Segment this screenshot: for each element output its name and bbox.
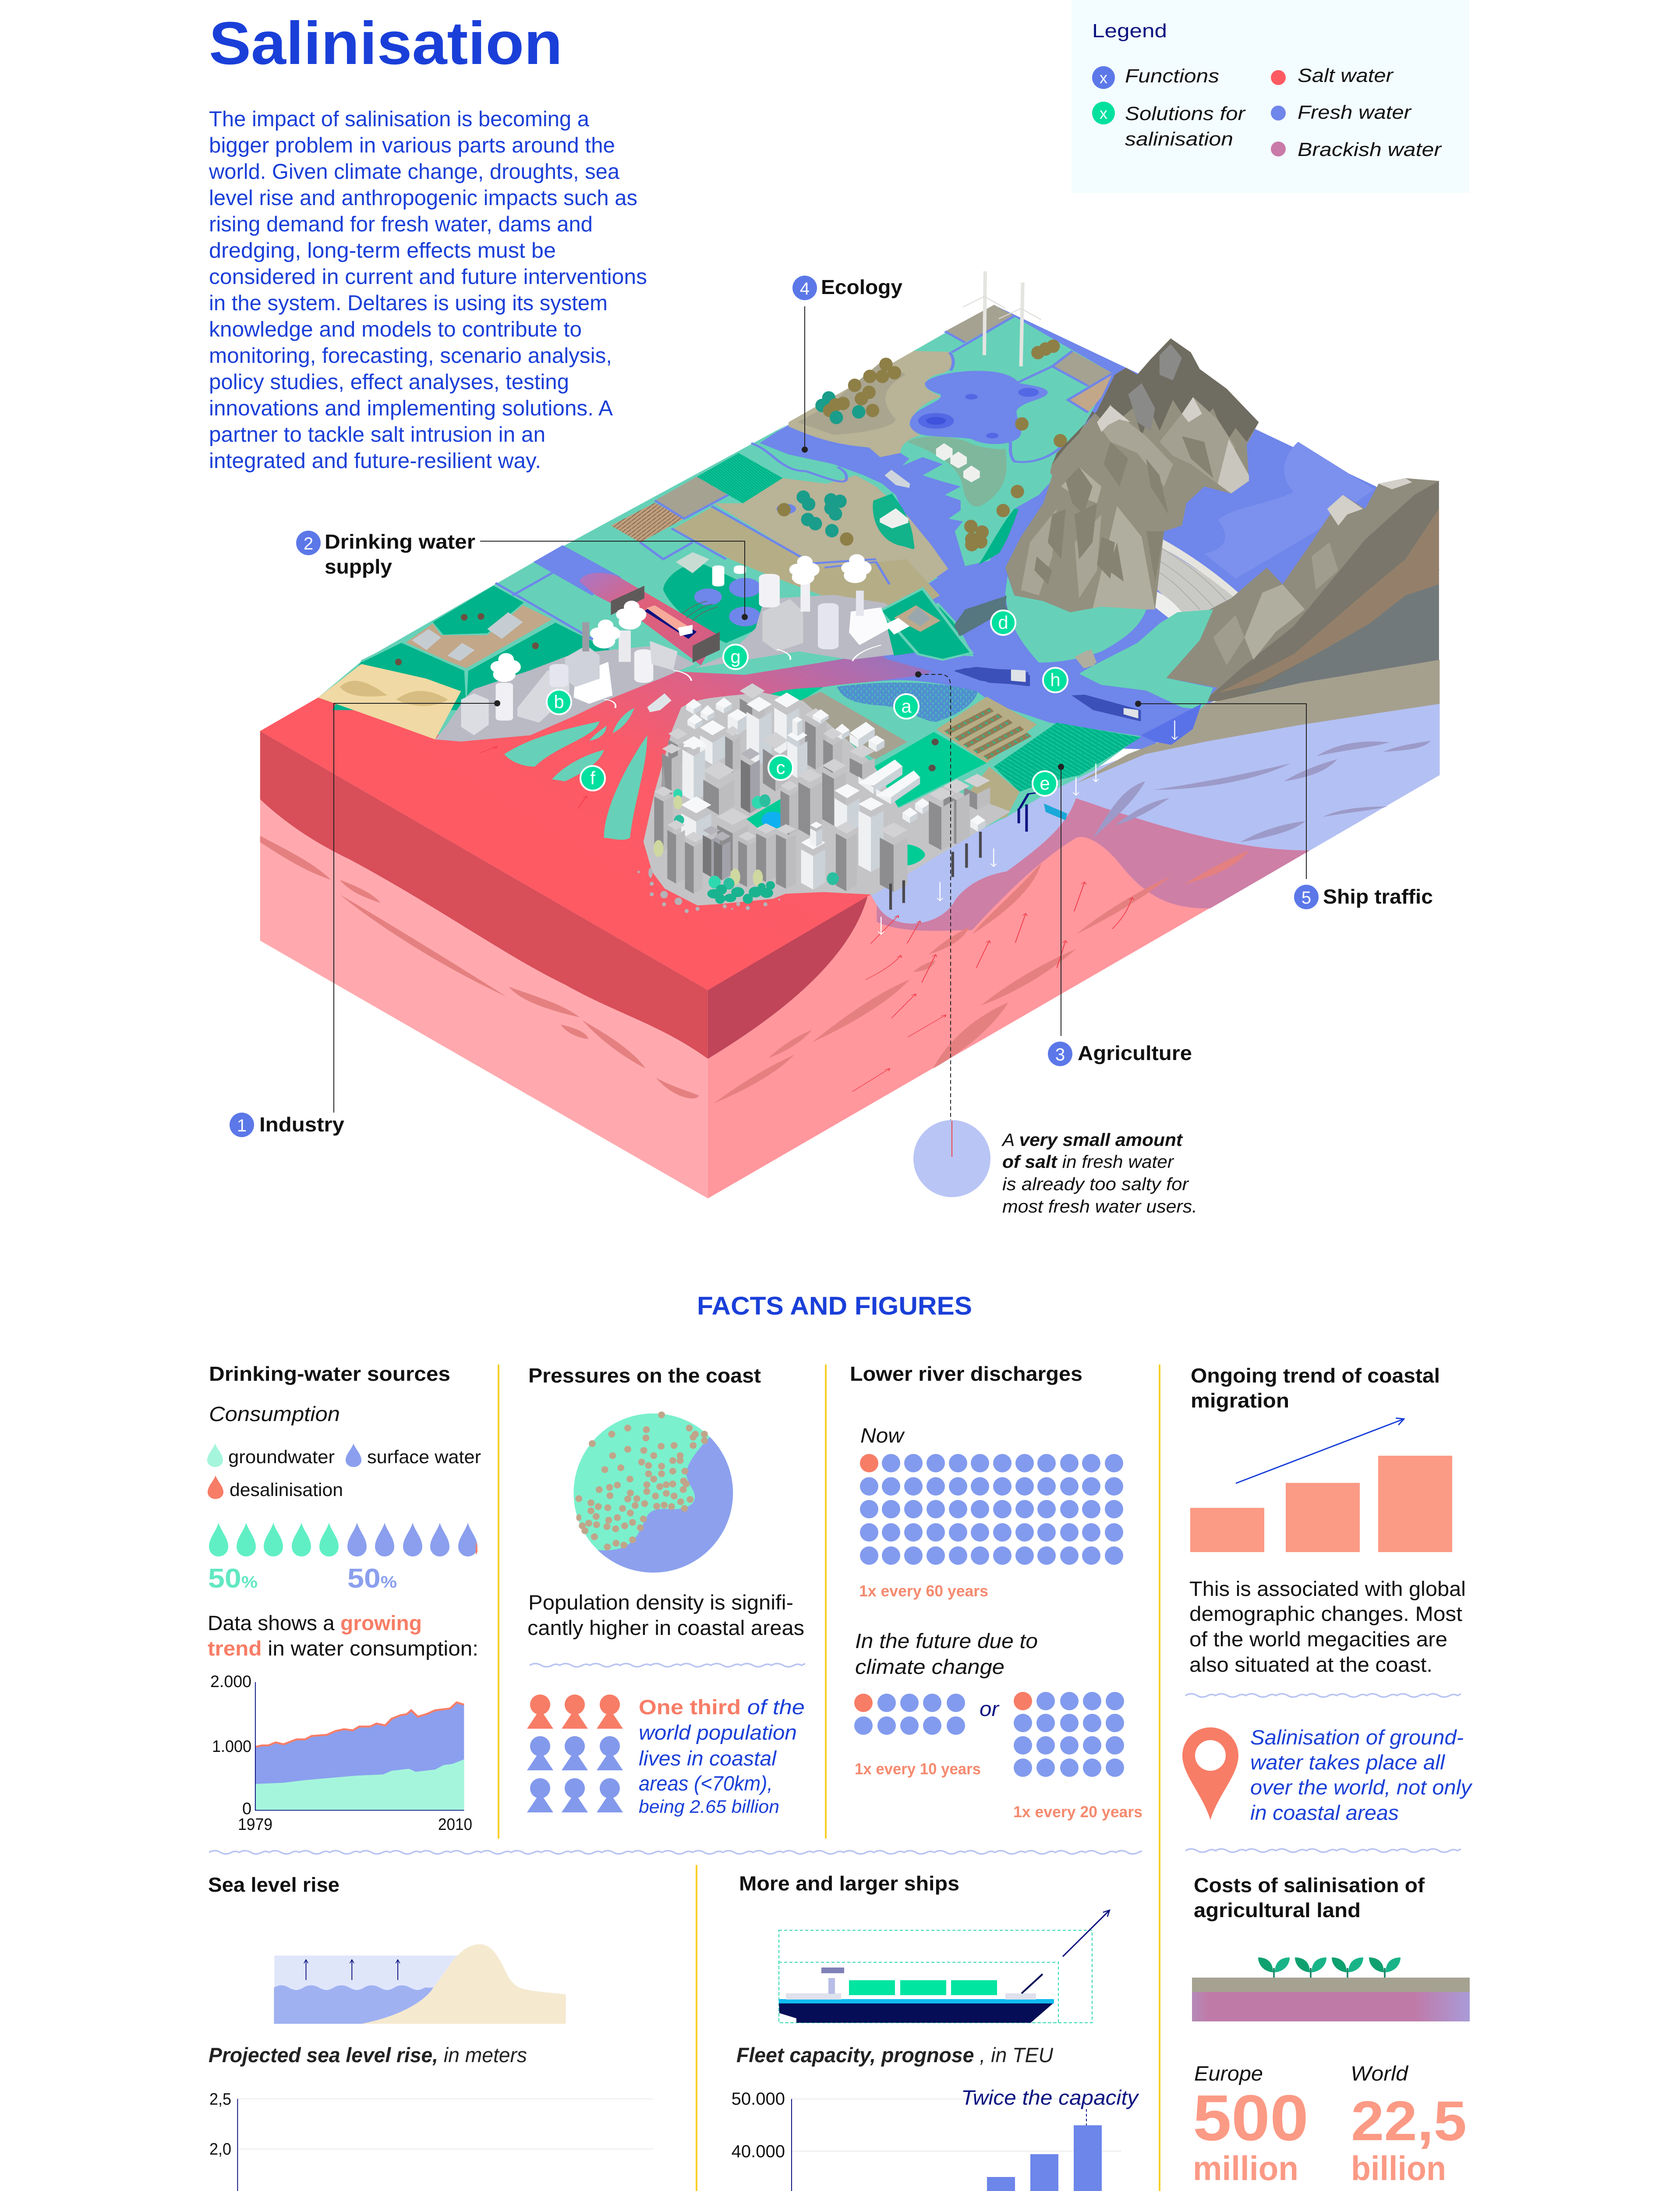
trend arrow (1236, 1419, 1404, 1483)
panel: legend (1072, 0, 1469, 193)
label 1 industry: 1 (237, 1116, 247, 1135)
panel: coastal migration: migration (1191, 1389, 1289, 1412)
dune illustration (274, 1944, 566, 2024)
line chart (209, 2090, 670, 2191)
heading: Costs of salinisation of (1194, 1874, 1425, 1897)
drop legend: desalinisation (230, 1479, 343, 1500)
city buildings (654, 683, 990, 894)
solution badges a to h: h (1050, 670, 1061, 690)
land south-west of the river (318, 424, 938, 736)
legend: solutions: Solutions for (1125, 103, 1246, 124)
heading: Sea level rise (208, 1873, 340, 1896)
panel: coastal migration (1182, 1364, 1473, 1824)
one third text: world population (639, 1721, 797, 1744)
intro text: bigger problem in various parts around the (209, 134, 615, 157)
heading: More and larger ships (739, 1872, 959, 1895)
intro text: dredging, long-term effects must be (209, 239, 556, 262)
legend heading: Legend (1092, 20, 1167, 42)
legend: salt water (1271, 65, 1394, 86)
legend: salt water: Salt water (1298, 65, 1394, 86)
label 4 ecology: Ecology (821, 276, 902, 298)
title: Salinisation (209, 10, 562, 77)
trees and wind turbines (776, 271, 1067, 551)
bar chart: 50.000 (732, 2089, 785, 2109)
drop legend (207, 1443, 481, 1500)
annotation: Twice the capacity (961, 2086, 1139, 2109)
future label: In the future due to (855, 1629, 1038, 1652)
legend: solutions (1092, 102, 1246, 150)
label 4 ecology (792, 276, 902, 300)
legend: fresh water: Fresh water (1298, 102, 1412, 123)
top surface: fresh water (760, 305, 1439, 749)
area chart: 1.000 (212, 1737, 251, 1756)
leader dots (494, 447, 1141, 770)
frequency 60 years: 1x every 60 years (859, 1582, 988, 1600)
fifty percent labels: 50% (208, 1563, 258, 1594)
solution badges a to h: d (998, 612, 1008, 633)
label 5 ship traffic: 5 (1302, 888, 1311, 908)
panel: costs of salinisation: agricultural land (1194, 1899, 1361, 1922)
salt intrusion arrows (852, 882, 1132, 1092)
panel: pressures on the coast (527, 1364, 805, 1817)
groundwater text: in coastal areas (1250, 1801, 1399, 1824)
panel: sea level rise (208, 1873, 670, 2191)
dots: every 20 years (1014, 1692, 1124, 1777)
dam (1132, 527, 1240, 618)
area chart: 1979 (238, 1815, 272, 1834)
callout: small amount of salt: of salt in fresh water (1002, 1152, 1174, 1172)
intro text: integrated and future-resilient way. (209, 449, 541, 473)
migration text: This is associated with global (1189, 1577, 1466, 1600)
intro text: considered in current and future interventions (209, 265, 647, 289)
or: or (980, 1697, 1000, 1720)
soil illustration (1192, 1957, 1470, 2021)
world figure: 22,5 (1351, 2090, 1467, 2152)
one third text: areas (<70km), (639, 1772, 773, 1795)
industrial areas and sand (318, 595, 972, 741)
intro text: policy studies, effect analyses, testing (209, 370, 569, 394)
density text: Population density is signifi- (528, 1591, 793, 1614)
europe figure (1192, 2062, 1309, 2191)
legend: functions: Functions (1125, 65, 1219, 87)
population globe (573, 1411, 738, 1580)
islands, ships and structures (504, 596, 1141, 840)
bar chart (732, 2086, 1139, 2191)
label 2 drinking water supply: 2 (304, 534, 313, 553)
callout: small amount of salt: is already too salty for (1002, 1174, 1189, 1194)
line chart: 2,5 (209, 2090, 231, 2109)
solution badges a to h (547, 610, 1068, 796)
intro text: partner to tackle salt intrusion in an (209, 423, 545, 447)
sea surface (260, 632, 981, 990)
drop legend: groundwater (228, 1446, 335, 1467)
icon: location pin (1182, 1727, 1238, 1820)
legend: solutions: salinisation (1125, 128, 1233, 150)
panel: lower river discharges (850, 1362, 1142, 1821)
line chart: 2,0 (209, 2140, 231, 2159)
label 1 industry (230, 1113, 344, 1137)
legend: solutions: x (1100, 104, 1107, 122)
label 2 drinking water supply: supply (325, 555, 392, 578)
leader line: industry (334, 703, 497, 1113)
panel: lower river discharges: climate change (855, 1655, 1004, 1678)
migration text (1189, 1577, 1466, 1676)
intro text: monitoring, forecasting, scenario analysis, (209, 344, 612, 368)
dashed leader line to salt callout (918, 674, 951, 1121)
label 2 drinking water supply: Drinking water (325, 530, 475, 553)
one third text: being 2.65 billion (639, 1796, 779, 1817)
area chart: 2010 (438, 1815, 472, 1834)
frequency 10 years: 1x every 10 years (855, 1760, 981, 1778)
one third text: lives in coastal (639, 1747, 777, 1770)
leader line: ecology (804, 306, 805, 450)
intro text: rising demand for fresh water, dams and (209, 213, 593, 236)
fifty percent labels: 50% (347, 1563, 397, 1594)
main mountain (1005, 338, 1259, 612)
one third text (639, 1695, 805, 1817)
land north of the river (789, 305, 1113, 566)
dots: now (860, 1454, 1123, 1565)
world figure (1351, 2062, 1467, 2191)
solution badges a to h: e (1040, 773, 1050, 794)
power plants and chimneys (461, 554, 909, 735)
callout: small amount of salt: most fresh water users. (1002, 1196, 1197, 1216)
label 2 drinking water supply (296, 530, 475, 578)
solution badges a to h: a (901, 696, 912, 716)
legend: functions (1092, 65, 1219, 89)
mountains and dam (1005, 338, 1439, 701)
reservoir tint (1204, 442, 1374, 579)
drop pictogram (209, 1523, 477, 1556)
label 4 ecology: 4 (800, 279, 810, 298)
one third text: One third of the (639, 1695, 805, 1719)
label 5 ship traffic: Ship traffic (1323, 885, 1433, 908)
right mountain (1166, 478, 1439, 701)
groundwater text: Salinisation of ground- (1250, 1726, 1464, 1749)
migration text: of the world megacities are (1189, 1627, 1447, 1651)
label 3 agriculture: 3 (1055, 1045, 1065, 1064)
callout: small amount of salt (913, 1120, 1197, 1216)
heading: Lower river discharges (850, 1362, 1082, 1385)
sea arrows (480, 747, 587, 808)
legend: brackish water: Brackish water (1298, 139, 1443, 160)
intro text: knowledge and models to contribute to (209, 318, 582, 341)
chart title: Fleet capacity, prognose , in TEU (736, 2043, 1054, 2067)
coastal land and eastern tan bank (782, 660, 1439, 894)
wave dividers (209, 1662, 1468, 2191)
leader line: ship traffic (1138, 704, 1306, 879)
solution badges a to h: b (554, 691, 564, 712)
frequency 20 years: 1x every 20 years (1013, 1803, 1142, 1821)
section heading: facts and figures: FACTS AND FIGURES (697, 1292, 972, 1320)
reeds, fields and city base (644, 683, 1037, 905)
leader line: drinking water (480, 541, 745, 617)
panel: pressures on the coast: cantly higher in coastal areas (527, 1616, 804, 1639)
label 3 agriculture (1048, 1042, 1192, 1066)
groundwater text: water takes place all (1250, 1751, 1446, 1774)
south banks and coastal land (880, 470, 1213, 710)
people pictogram (527, 1695, 623, 1812)
intro text (209, 107, 647, 473)
migration text: demographic changes. Most (1189, 1602, 1462, 1625)
label 3 agriculture: Agriculture (1078, 1042, 1192, 1064)
intro text: world. Given climate change, droughts, sea (209, 160, 620, 184)
heading: Pressures on the coast (528, 1364, 761, 1387)
fifty percent labels (208, 1563, 397, 1594)
ship illustration (779, 1910, 1110, 2023)
area chart (210, 1673, 472, 1834)
right face of the block: salt wedge and fresh groundwater (708, 702, 1439, 1198)
fields and farmland (332, 443, 948, 710)
block diagram: delta cross-section (260, 271, 1439, 1198)
heading: Drinking-water sources (209, 1362, 450, 1385)
intro text: in the system. Deltares is using its system (209, 291, 608, 315)
europe figure: million (1193, 2149, 1298, 2187)
europe figure: Europe (1194, 2062, 1263, 2085)
panel: drinking-water sources: trend in water consumption: (208, 1637, 478, 1660)
dots: every 10 years (854, 1694, 965, 1735)
europe figure: 500 (1193, 2082, 1309, 2154)
subheading: Consumption (209, 1402, 340, 1425)
panel: costs of salinisation (1192, 1874, 1470, 2191)
trend bars (1190, 1456, 1452, 1552)
trend text: Data shows a growing (208, 1611, 422, 1634)
city trees and pebbles (637, 832, 980, 913)
legend: functions: x (1100, 69, 1107, 87)
now label: Now (860, 1424, 905, 1447)
column dividers (499, 1365, 1160, 2191)
left face of the block (260, 731, 708, 1198)
world figure: billion (1351, 2149, 1446, 2187)
callout: small amount of salt: A very small amount (1001, 1130, 1183, 1150)
intro text: innovations and implementing solutions. A (209, 397, 613, 420)
solution badges a to h: c (776, 757, 785, 778)
intro text: level rise and anthropogenic impacts such as (209, 186, 637, 210)
migration text: also situated at the coast. (1189, 1653, 1432, 1676)
area chart: 2.000 (210, 1673, 251, 1691)
intro text: The impact of salinisation is becoming a (209, 107, 590, 131)
bar chart: 40.000 (732, 2142, 785, 2161)
solution badges a to h: f (590, 768, 595, 788)
fresh water arrows (881, 720, 1174, 934)
panel: more and larger ships (732, 1872, 1139, 2191)
panel: drinking-water sources (207, 1362, 481, 1834)
groundwater text: over the world, not only (1250, 1776, 1473, 1799)
area chart: 0 (242, 1800, 251, 1818)
drop legend: surface water (367, 1446, 481, 1467)
label 1 industry: Industry (259, 1113, 344, 1136)
groundwater text (1250, 1726, 1473, 1824)
solution badges a to h: g (730, 646, 741, 667)
chart title: Projected sea level rise, in meters (209, 2043, 527, 2067)
world figure: World (1351, 2062, 1409, 2085)
heading: Ongoing trend of coastal (1191, 1364, 1440, 1387)
